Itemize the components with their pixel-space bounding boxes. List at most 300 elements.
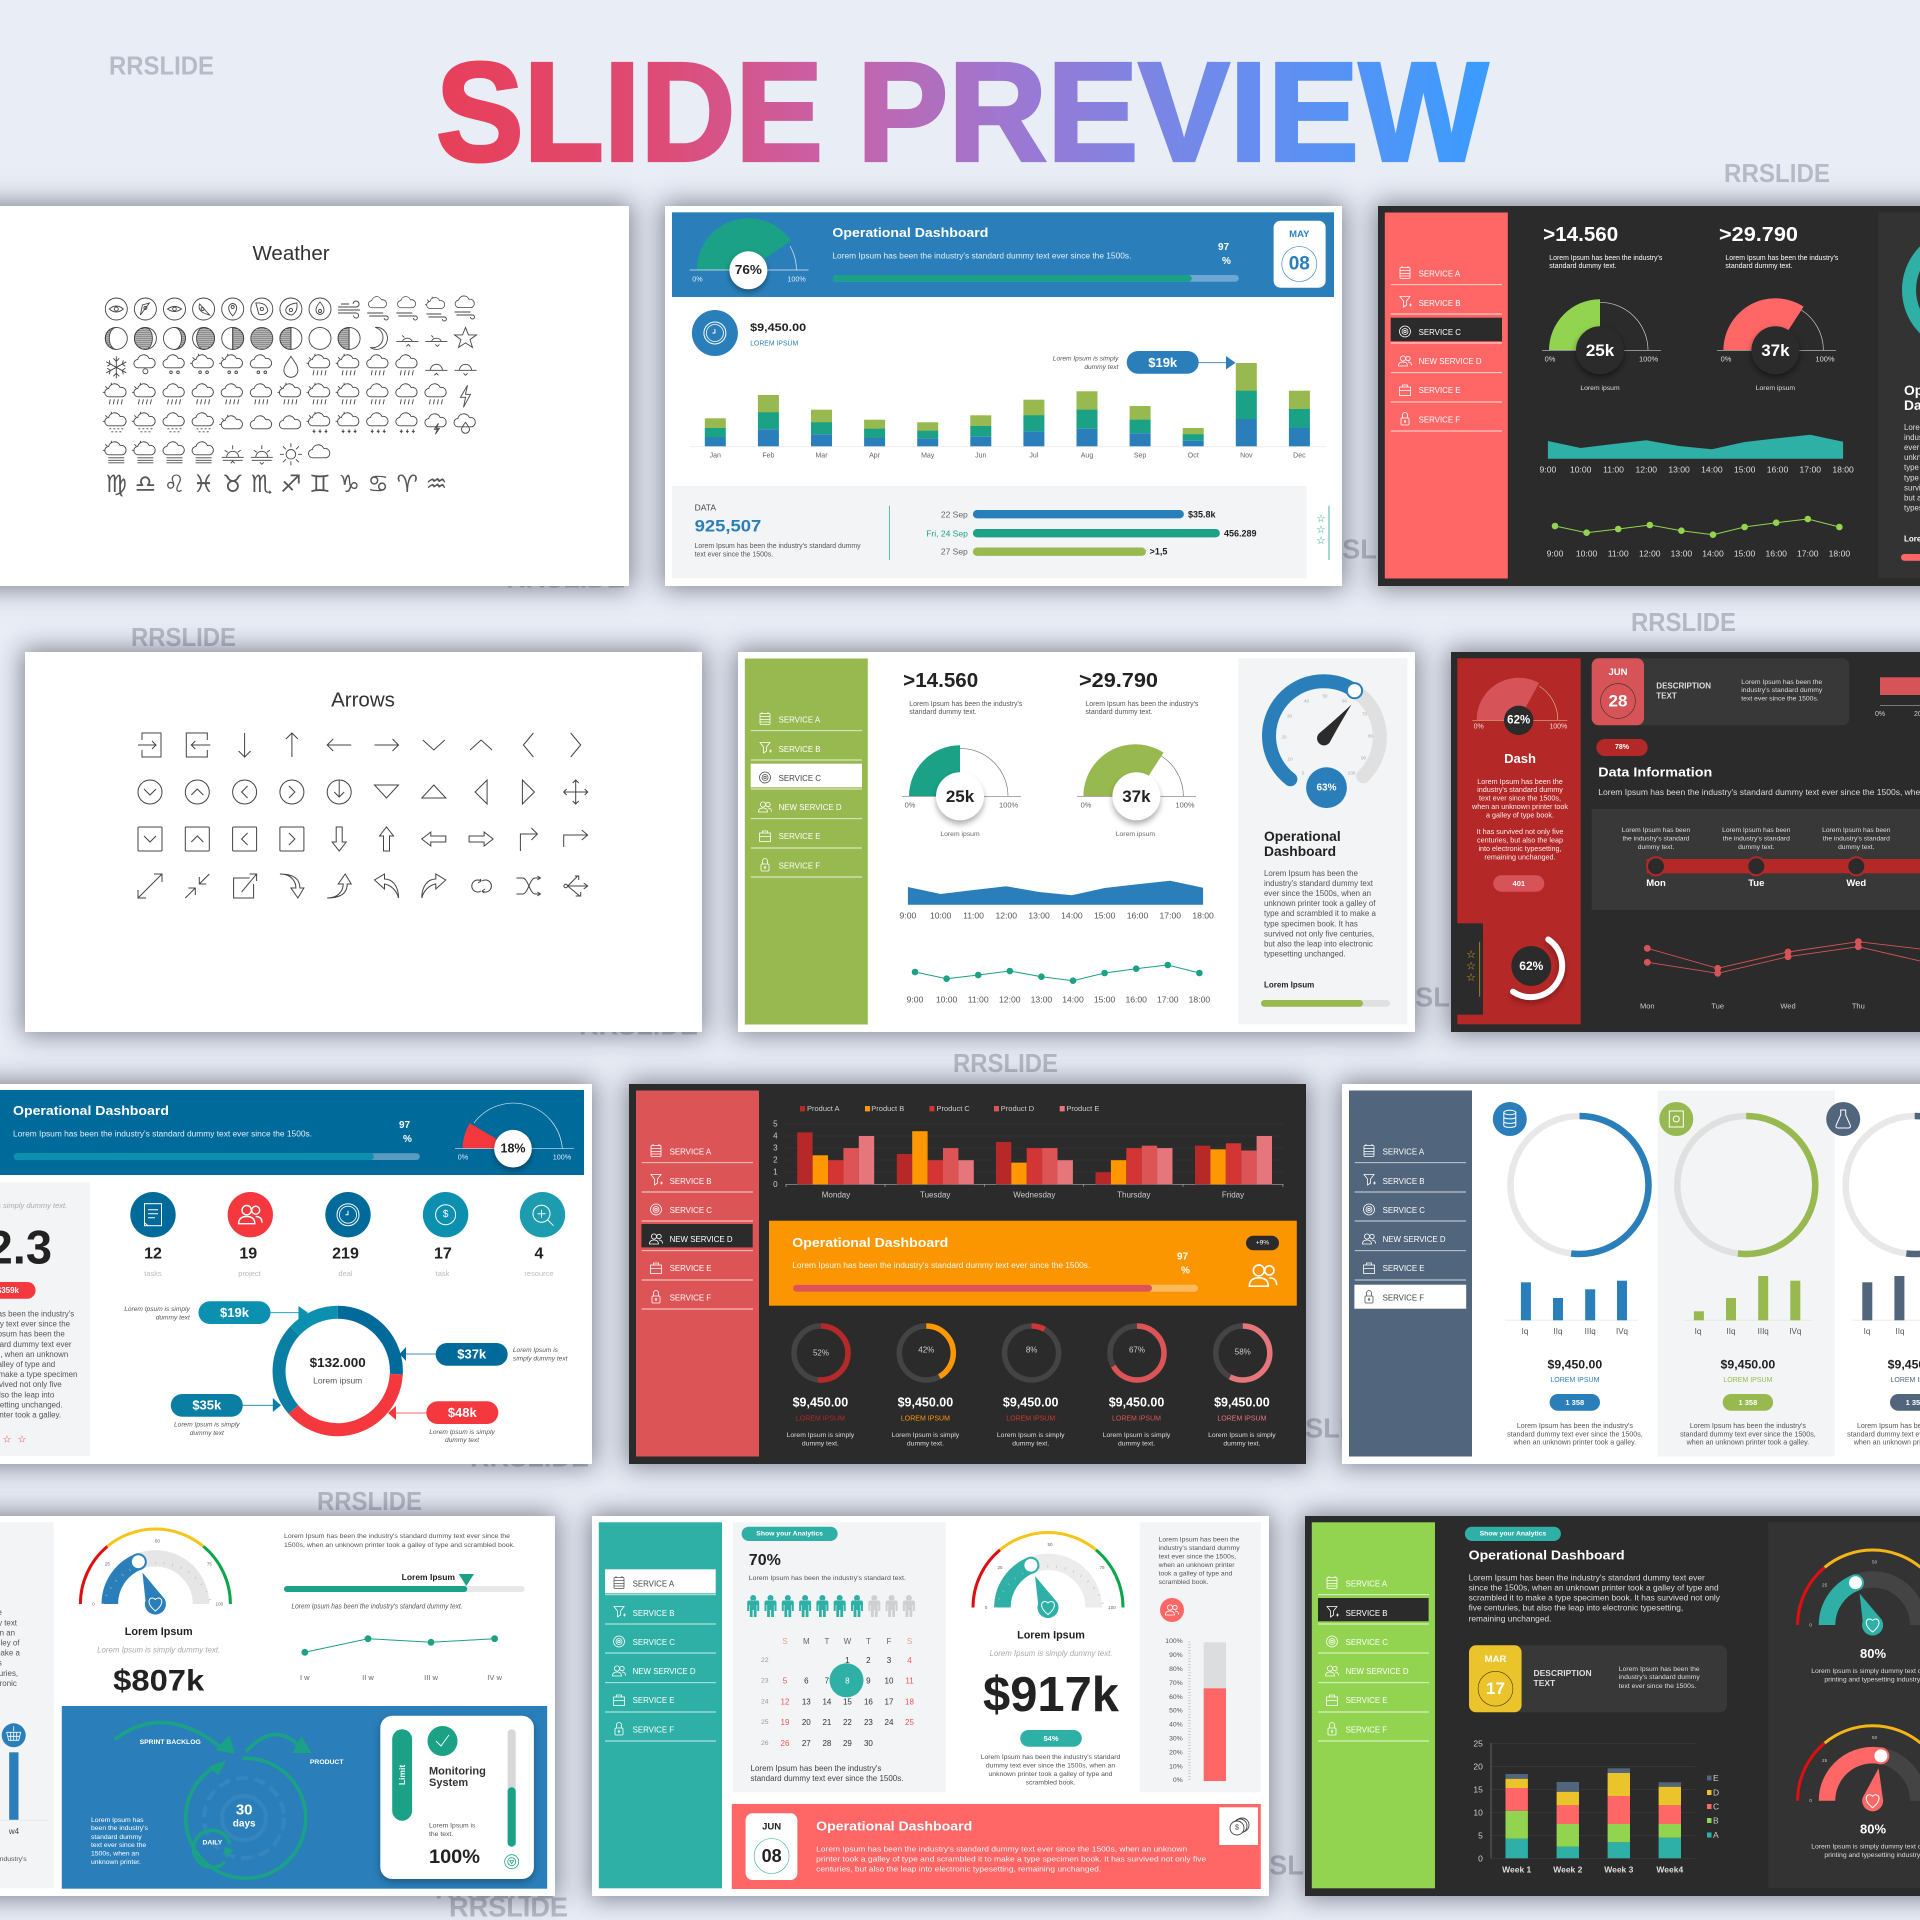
icons: zodiac row: ♈	[397, 470, 418, 498]
column: green ring: LOREM IPSUM	[1723, 1377, 1773, 1384]
speedometer gauge: 63%	[1316, 782, 1337, 794]
callout: $37k: Lorem Ipsum is	[513, 1347, 559, 1354]
line chart: III w	[424, 1673, 438, 1682]
timeline panel: dummy text.	[1838, 844, 1875, 851]
gauge 62%	[1472, 678, 1567, 735]
date banner: TEXT	[1656, 692, 1677, 700]
stacked bar chart: Sep	[1134, 452, 1146, 460]
progress value: %	[1222, 256, 1231, 267]
callout: $35k: dummy text	[190, 1430, 225, 1437]
panel: gauges: printing and typesetting industry.	[1824, 1852, 1920, 1859]
panel: left summary: ☆	[3, 1434, 12, 1446]
grouped bar chart: 2	[773, 1156, 778, 1165]
column: blue ring: IIq	[1554, 1327, 1562, 1336]
panel: analytics calendar: standard dummy text ever since the 1500s.	[750, 1774, 903, 1783]
arrows row 1	[138, 733, 581, 757]
area chart: 15:00	[1094, 910, 1116, 920]
donut row: 8%	[1026, 1346, 1037, 1354]
stacked bar chart: Dec	[1293, 452, 1306, 460]
calendar: 13	[802, 1698, 811, 1706]
speedometer gauge	[1269, 681, 1380, 808]
panel: sprint diagram: Lorem Ipsum has	[91, 1817, 144, 1824]
timeline panel: dummy text.	[1638, 844, 1674, 851]
stats: >29.790	[1079, 670, 1158, 692]
icons: zodiac row: ♐	[280, 470, 302, 498]
panel: sprint diagram: PRODUCT	[310, 1759, 344, 1766]
gauge 18%: 100%	[553, 1152, 572, 1162]
progress bar	[793, 1285, 1198, 1292]
gauge labels: Lorem Ipsum is simply dummy text.	[97, 1646, 220, 1654]
calendar: 3	[887, 1656, 892, 1665]
chart legend: Product B	[871, 1104, 904, 1113]
calendar: 22	[843, 1718, 852, 1727]
calendar: 1	[845, 1656, 850, 1665]
column: blue ring: 1 358	[1565, 1398, 1584, 1407]
header banner: 97	[399, 1120, 411, 1131]
panel: dark products slide	[629, 1084, 1306, 1464]
sidebar menu: SERVICE F	[1383, 1294, 1424, 1302]
text block: five centuries, but also the leap into electronic typesetting,	[1469, 1603, 1683, 1613]
title: SLIDE PREVIEW: PREVIEW	[857, 32, 1488, 190]
sidebar menu: SERVICE E	[1419, 386, 1461, 395]
banner description: Lorem Ipsum has been the industry's standard dummy text ever since the 1500s.	[832, 252, 1131, 260]
amount	[750, 322, 806, 348]
column: blue ring: $9,450.00	[1548, 1357, 1602, 1371]
donut chart: $132.000	[310, 1355, 366, 1370]
stat icons row: resource	[524, 1269, 554, 1278]
calendar: 26	[761, 1740, 769, 1747]
area chart: 18:00	[1832, 464, 1854, 474]
calendar: 30	[864, 1739, 873, 1748]
donut row: $9,450.00	[898, 1396, 953, 1410]
stacked bar chart: 10	[1473, 1807, 1483, 1817]
icon: users	[1249, 1265, 1277, 1286]
monitoring card: Limit	[397, 1765, 407, 1785]
red side panel: remaining unchanged.	[1484, 852, 1556, 862]
sidebar menu: NEW SERVICE D	[633, 1667, 696, 1676]
watermarks: RRSLIDE	[953, 1048, 1058, 1078]
active item: NEW SERVICE D	[641, 1224, 753, 1247]
area chart: 10:00	[930, 910, 952, 920]
area chart: 16:00	[1127, 910, 1148, 920]
stacked bar chart	[690, 363, 1326, 460]
stacked bar chart: Jun	[975, 452, 987, 460]
thermometer chart: 20%	[1169, 1749, 1183, 1756]
date card: 08	[762, 1846, 782, 1866]
horizontal bars: $35.8k	[1188, 509, 1217, 519]
sidebar menu: SERVICE B	[779, 745, 821, 754]
stats	[903, 670, 1199, 716]
area chart: 16:00	[1767, 464, 1788, 474]
date banner: industry's standard dummy	[1741, 687, 1823, 694]
panel: right column: industry's standard dummy	[1159, 1545, 1240, 1552]
stat icons row: 4	[535, 1246, 544, 1262]
monitoring card: Monitoring	[429, 1765, 486, 1777]
stacked bar chart: Apr	[869, 452, 881, 460]
sidebar menu: SERVICE C	[1346, 1638, 1388, 1647]
gauge labels: Lorem Ipsum is simply dummy text.	[990, 1649, 1112, 1658]
panel: right column: Lorem Ipsum has been the	[1159, 1536, 1240, 1544]
text block: since the 1500s, when an unknown printer took a galley of type and	[1469, 1583, 1719, 1593]
sidebar menu: SERVICE E	[779, 832, 821, 841]
gauge: 75	[1099, 1565, 1105, 1570]
line chart: 18:00	[1829, 549, 1850, 559]
speedometer gauge: 60	[1342, 698, 1347, 704]
progress bar	[14, 1153, 420, 1160]
line chart: 13:00	[1031, 995, 1052, 1005]
panel: gauge summary	[1878, 212, 1920, 578]
gauge 18%	[455, 1103, 574, 1168]
calendar: 7	[825, 1676, 830, 1686]
panel: speedometer summary	[1238, 658, 1407, 1024]
stats: standard dummy text.	[909, 709, 977, 716]
sidebar menu: SERVICE B	[1346, 1609, 1388, 1618]
thermometer chart: 40%	[1169, 1722, 1183, 1729]
red side panel: into electronic typesetting,	[1478, 844, 1562, 853]
speedometer gauge: 40	[1304, 698, 1309, 704]
area chart: 12:00	[1636, 464, 1657, 474]
date banner: text ever since the 1500s.	[1619, 1683, 1696, 1690]
column: green ring: $9,450.00	[1721, 1357, 1775, 1371]
panel: sprint diagram: been the industry's	[91, 1825, 148, 1832]
donut row: 52%	[813, 1348, 829, 1358]
sidebar menu: SERVICE E	[1346, 1696, 1388, 1705]
gauge 80% coral	[1798, 1726, 1920, 1811]
donut row: Lorem Ipsum is simply	[1208, 1432, 1276, 1439]
calendar: M	[803, 1637, 810, 1646]
horizontal bars: 456.289	[1224, 528, 1257, 538]
panel: data summary	[672, 486, 1307, 578]
panel: analytics calendar slide	[592, 1516, 1269, 1896]
gauge 25k: 100%	[999, 800, 1019, 810]
timeline panel: the industry's standard	[1723, 836, 1790, 842]
pill: Show your Analytics: Show your Analytics	[756, 1530, 823, 1538]
red side panel: Lorem Ipsum has been the	[1477, 777, 1563, 786]
watermarks: RRSLIDE	[470, 1442, 589, 1472]
gauge: 50	[1047, 1542, 1053, 1547]
panel: gauges: 80%	[1860, 1822, 1886, 1836]
panel: speedometer summary: Dashboard	[1264, 844, 1336, 859]
donut row: dummy text.	[1118, 1440, 1155, 1448]
chart legend: B	[1713, 1816, 1719, 1826]
orange banner: 97	[1177, 1252, 1189, 1262]
text block: Lorem Ipsum has been the industry's standard dummy text ever since the	[284, 1533, 510, 1540]
line chart: 11:00	[1608, 549, 1629, 559]
sidebar menu: SERVICE C	[670, 1206, 712, 1215]
watermarks: RRSLIDE	[109, 50, 214, 80]
date banner: Lorem Ipsum has been the	[1619, 1666, 1700, 1673]
sidebar menu	[1385, 212, 1508, 578]
callout: $19k: Lorem Ipsum is simply	[124, 1306, 190, 1313]
icon: resource search	[520, 1192, 565, 1237]
column: blue ring: LOREM IPSUM	[1550, 1377, 1600, 1384]
callout: $37k: $37k	[457, 1347, 487, 1362]
thermometer chart: 70%	[1169, 1680, 1183, 1687]
heading: Operational Dashboard: Operational Dashboard	[1469, 1548, 1625, 1562]
gauge labels	[97, 1626, 220, 1698]
rating stars: ☆	[1316, 524, 1326, 536]
coral banner: Operational Dashboard	[816, 1818, 972, 1834]
sidebar menu: NEW SERVICE D	[1346, 1667, 1409, 1676]
active item: SERVICE B	[1318, 1598, 1429, 1621]
panel: sprint diagram: SPRINT BACKLOG	[140, 1739, 201, 1746]
gauge labels: Lorem Ipsum	[1017, 1630, 1085, 1642]
stacked bar chart: Jul	[1029, 452, 1039, 460]
stacked bar chart: 15	[1473, 1784, 1483, 1794]
stats	[1543, 224, 1839, 270]
chart legend: Product C	[936, 1104, 970, 1113]
thermometer chart: 10%	[1169, 1763, 1183, 1770]
line chart: 14:00	[1702, 549, 1724, 559]
gauge labels	[981, 1630, 1121, 1786]
icons: moon phase row	[105, 327, 477, 349]
sidebar menu	[599, 1522, 722, 1888]
chart legend	[800, 1104, 1099, 1113]
icon grid: arrows	[138, 733, 588, 898]
panel: speedometer summary: typesetting unchanged.	[1264, 950, 1346, 959]
icon: coins	[1219, 1807, 1258, 1845]
rating stars: ☆	[1316, 513, 1326, 525]
coral banner: centuries, but also the leap into electronic typesetting, remaining unchanged.	[816, 1864, 1101, 1874]
stacked bar chart: Nov	[1240, 452, 1253, 460]
column: green ring: Lorem Ipsum has been the industry's	[1690, 1422, 1806, 1430]
red side panel: It has survived not only five	[1477, 827, 1563, 836]
line chart: Thu	[1852, 1002, 1865, 1010]
sidebar menu: SERVICE F	[633, 1726, 674, 1734]
panel: gauges: 80%	[1860, 1646, 1886, 1661]
panel: speedometer summary: industry's standard dummy text	[1264, 879, 1374, 888]
line chart: 10:00	[1576, 549, 1598, 559]
pill: Show your Analytics: Show your Analytics	[1480, 1530, 1546, 1538]
pill: Show your Analytics	[742, 1527, 838, 1541]
column: green ring: IVq	[1789, 1327, 1801, 1336]
gauge 25k	[902, 745, 1021, 838]
calendar: 9	[866, 1676, 871, 1686]
small bar chart: 0%	[1875, 711, 1885, 718]
watermarks: RRSLIDE	[1303, 534, 1422, 564]
gauge 80% teal: 50	[1872, 1560, 1878, 1564]
sidebar menu: SERVICE A	[633, 1580, 675, 1588]
gauge 76%: 76%	[735, 263, 762, 277]
orange banner	[769, 1221, 1297, 1306]
progress marker: Lorem Ipsum has been the industry's standard dummy text.	[292, 1604, 463, 1610]
gauge 76%	[690, 218, 808, 289]
calendar: 23	[864, 1718, 873, 1727]
pill +9%: +9%	[1256, 1240, 1269, 1246]
stacked bar chart: 20	[1473, 1761, 1483, 1771]
rating stars: ☆	[1316, 535, 1326, 547]
callout: $37k: simply dummy text	[513, 1356, 569, 1362]
timeline panel: Mon	[1646, 878, 1666, 889]
calendar: 20	[802, 1718, 811, 1727]
title: SLIDE PREVIEW: SLIDE	[436, 32, 823, 190]
horizontal bars: >1,5	[1150, 547, 1167, 557]
line chart: II w	[362, 1673, 374, 1682]
panel: dark analytics slide	[1305, 1516, 1920, 1896]
calendar: 8	[845, 1676, 850, 1686]
panel: speedometer summary: survived not only five centuries,	[1264, 929, 1374, 938]
line chart: 9:00	[907, 995, 924, 1005]
column: slate ring: Iq	[1864, 1327, 1870, 1336]
header banner: Lorem Ipsum has been the industry's standard dummy text ever since the 1500s.	[13, 1130, 312, 1138]
gauge 37k: 37k	[1122, 787, 1151, 806]
column: blue ring: Lorem Ipsum has been the industry's	[1517, 1422, 1633, 1430]
chart legend: C	[1713, 1802, 1719, 1812]
speedometer gauge: 80	[1368, 734, 1373, 738]
rating stars	[1456, 923, 1483, 1015]
chart legend: Product A	[807, 1104, 840, 1113]
column: blue ring: Iq	[1522, 1327, 1528, 1336]
panel: gauges	[1768, 1522, 1920, 1888]
red side panel	[1456, 658, 1581, 1024]
gauge 37k	[1077, 744, 1196, 838]
date card	[1274, 221, 1326, 288]
header banner	[0, 1090, 584, 1175]
gauge 25k: Lorem ipsum	[940, 831, 980, 838]
speedometer gauge: 50	[1322, 694, 1328, 698]
watermarks: RRSLIDE	[131, 622, 236, 652]
red side panel: a galley of type book.	[1486, 810, 1554, 820]
date banner: text ever since the 1500s.	[1741, 696, 1819, 702]
stat icons row: 17	[434, 1246, 452, 1262]
column: green ring	[1658, 1090, 1835, 1456]
gauge	[80, 1529, 230, 1615]
gauge 18%: 0%	[458, 1152, 469, 1162]
line chart: Tue	[1711, 1002, 1724, 1010]
panel: donut dashboard slide	[0, 1084, 592, 1464]
callout: $48k	[388, 1401, 498, 1444]
gauge: 25	[105, 1562, 110, 1566]
thermometer chart: 60%	[1169, 1694, 1183, 1701]
red side panel: industry's standard dummy	[1477, 785, 1563, 794]
gauge 62%: 62%	[1507, 714, 1530, 726]
panel: data summary: 925,507	[695, 516, 761, 536]
stats: Lorem Ipsum has been the industry's	[909, 701, 1023, 708]
icon: tasks	[130, 1192, 176, 1237]
thermometer chart: 0%	[1173, 1777, 1183, 1784]
horizontal bars: 22 Sep	[941, 509, 968, 519]
thermometer chart: 50%	[1169, 1708, 1183, 1715]
stacked bar chart: Jan	[710, 452, 721, 460]
callout: $19k: dummy text	[1084, 364, 1120, 371]
watermarks: RRSLIDE	[1376, 982, 1495, 1012]
area chart: 15:00	[1734, 464, 1756, 474]
sidebar menu: SERVICE B	[1383, 1177, 1425, 1186]
calendar: 17	[885, 1698, 894, 1706]
grouped bar chart: 3	[773, 1144, 778, 1153]
panel: left summary: ☆	[18, 1434, 27, 1446]
donut row: 42%	[918, 1346, 934, 1354]
donut row: $9,450.00	[1109, 1396, 1164, 1410]
calendar: 21	[822, 1718, 832, 1727]
calendar: T	[866, 1637, 871, 1646]
gauge: 100	[216, 1602, 224, 1606]
callout: $48k: $48k	[448, 1405, 478, 1420]
icons: compass and wind row	[105, 296, 475, 321]
date banner: 17	[1486, 1679, 1505, 1698]
progress value	[1218, 242, 1231, 267]
monitoring card: Lorem Ipsum is	[429, 1822, 476, 1830]
icons: zodiac row	[106, 470, 447, 498]
gauge labels: 54%	[1043, 1734, 1059, 1743]
watermarks: RRSLIDE	[435, 1874, 554, 1904]
calendar: F	[887, 1637, 892, 1646]
grouped bar chart: 0	[773, 1180, 778, 1189]
sidebar menu: SERVICE F	[1419, 416, 1460, 424]
date banner: Lorem Ipsum has been the	[1741, 679, 1822, 686]
sidebar menu: SERVICE B	[670, 1177, 712, 1186]
callout: $19k: $19k	[220, 1305, 250, 1320]
grouped bar chart: 4	[773, 1132, 778, 1140]
orange banner: %	[1181, 1266, 1190, 1276]
stacked bar chart	[1473, 1738, 1719, 1874]
icon: clock	[692, 310, 738, 356]
small bar chart	[1875, 677, 1920, 718]
column: green ring: standard dummy text ever since the 1500s,	[1680, 1430, 1816, 1438]
pill: Show your Analytics	[1465, 1527, 1561, 1541]
gauge 37k: 0%	[1721, 354, 1732, 364]
calendar: 28	[822, 1739, 832, 1748]
sidebar menu: SERVICE E	[633, 1696, 675, 1705]
coral banner: Lorem Ipsum has been the industry's standard dummy text ever since the 1500s, when an unknown	[816, 1844, 1187, 1854]
calendar: 22	[761, 1657, 769, 1664]
donut chart: Lorem ipsum	[313, 1375, 362, 1385]
calendar: 4	[907, 1656, 912, 1665]
arrows row 2	[138, 780, 588, 804]
line chart: 15:00	[1734, 549, 1756, 559]
red side panel: centuries, but also the leap	[1477, 836, 1563, 844]
gauge: 0	[92, 1602, 95, 1606]
watermarks: RRSLIDE	[506, 562, 625, 594]
panel: speedometer summary: Lorem Ipsum has been the	[1264, 869, 1358, 878]
area chart: 11:00	[963, 910, 984, 920]
sidebar menu: SERVICE E	[1383, 1264, 1425, 1273]
icons: drizzle and thunder row	[103, 412, 475, 434]
calendar: 2	[866, 1656, 871, 1665]
column: green ring: Iq	[1695, 1327, 1701, 1336]
panel: sprint diagram: 1500s, when an	[91, 1850, 139, 1858]
stats: Lorem Ipsum has been the industry's	[1725, 255, 1839, 262]
donut row: dummy text.	[1223, 1440, 1261, 1448]
speedometer gauge: 0	[1302, 770, 1305, 776]
progress value: 97	[1218, 242, 1230, 253]
area chart: 10:00	[1570, 464, 1592, 474]
text block	[1469, 1573, 1721, 1623]
icons: zodiac row: ♋	[367, 470, 389, 498]
calendar: 27	[802, 1739, 811, 1748]
sidebar menu: SERVICE A	[779, 716, 821, 724]
progress bar	[833, 275, 1239, 282]
gauge	[973, 1533, 1123, 1618]
sidebar menu: SERVICE F	[670, 1294, 711, 1302]
callout: $35k	[171, 1394, 281, 1437]
sidebar menu: SERVICE C	[1419, 328, 1461, 337]
icons: rain row	[103, 383, 471, 407]
column: green ring: IIq	[1727, 1327, 1735, 1336]
watermarks: RRSLIDE	[1266, 1412, 1385, 1444]
chart legend: D	[1713, 1787, 1719, 1797]
active item: SERVICE A	[605, 1569, 716, 1593]
panel: speedometer summary: Operational	[1264, 829, 1341, 844]
panel: sprint diagram: 30	[236, 1802, 253, 1818]
icon: basket	[2, 1723, 26, 1747]
line chart: IV w	[487, 1673, 502, 1682]
pill 401	[1493, 875, 1544, 892]
panel: speedometer summary: ever since the 1500s, when an	[1264, 889, 1371, 898]
arrows row 3	[138, 827, 588, 851]
area chart	[900, 881, 1214, 920]
donut row: Lorem Ipsum is simply	[892, 1432, 960, 1439]
